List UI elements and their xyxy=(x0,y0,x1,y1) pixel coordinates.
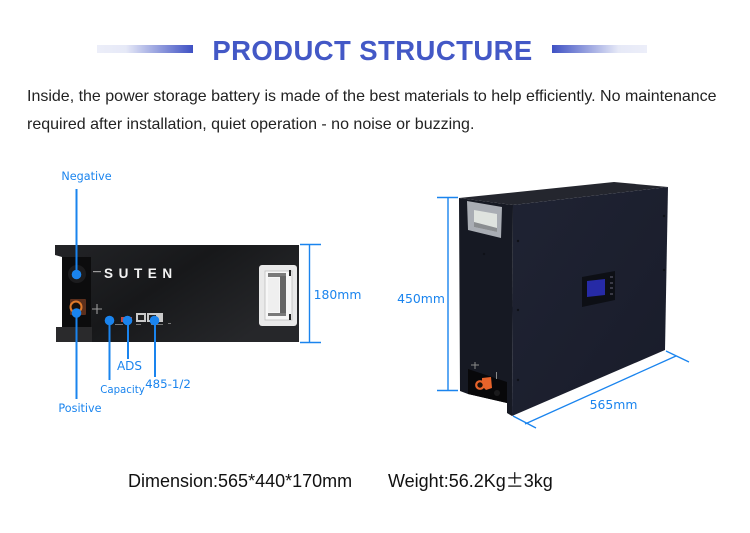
dimension: 565mm: 565mm xyxy=(590,397,637,412)
callout: 485-1/2: 485-1/2 xyxy=(145,377,191,391)
screws xyxy=(483,215,665,381)
weight text: Weight:56.2Kg±3kg xyxy=(388,467,553,493)
dimension text: Dimension:565*440*170mm xyxy=(128,471,352,491)
callout: positive: Positive xyxy=(58,402,102,415)
positive terminal xyxy=(476,377,492,390)
callout: 485-1/2 xyxy=(145,316,191,391)
callout: capacity xyxy=(100,316,145,396)
handle xyxy=(259,265,297,326)
plus mark xyxy=(471,362,479,369)
minus sign xyxy=(93,271,101,272)
dimension: 180mm: 180mm xyxy=(314,287,361,302)
display panel xyxy=(582,271,615,307)
callout: capacity: Capacity xyxy=(100,385,145,396)
callout: negative: Negative xyxy=(61,170,112,183)
handle xyxy=(467,201,502,238)
callouts on front view xyxy=(58,170,191,415)
title bar left xyxy=(97,45,193,53)
battery body xyxy=(55,245,299,342)
dimension: 565mm xyxy=(513,351,689,428)
positive terminal xyxy=(70,299,86,315)
callout: positive xyxy=(58,308,102,415)
dimension: 450mm: 450mm xyxy=(397,291,445,306)
negative terminal xyxy=(68,265,86,283)
callout: ADS xyxy=(117,316,142,373)
title bar right xyxy=(552,45,647,53)
title text: PRODUCT STRUCTURE xyxy=(212,35,533,66)
plus sign xyxy=(92,304,102,314)
negative terminal xyxy=(494,390,500,396)
dimension: 180mm xyxy=(300,244,361,342)
intro text block xyxy=(27,88,717,133)
title xyxy=(97,35,647,66)
front view battery xyxy=(55,245,299,342)
ports xyxy=(115,313,171,325)
side view battery xyxy=(459,182,668,416)
intro text block: Inside, the power storage battery is made of the best materials to help efficiently. No maintenance xyxy=(27,88,717,105)
callout: ADS: ADS xyxy=(117,359,142,373)
top face xyxy=(459,182,668,205)
terminal notch xyxy=(468,369,507,403)
intro text block: required after installation, quiet operation - no noise or buzzing. xyxy=(27,116,474,133)
callout: negative xyxy=(61,170,112,279)
minus mark xyxy=(496,372,497,379)
brand name: SUTEN xyxy=(104,266,178,281)
recessed terminal bay xyxy=(62,257,91,327)
dimension: 450mm xyxy=(397,198,458,390)
front face xyxy=(459,198,513,416)
side panel xyxy=(512,187,668,416)
